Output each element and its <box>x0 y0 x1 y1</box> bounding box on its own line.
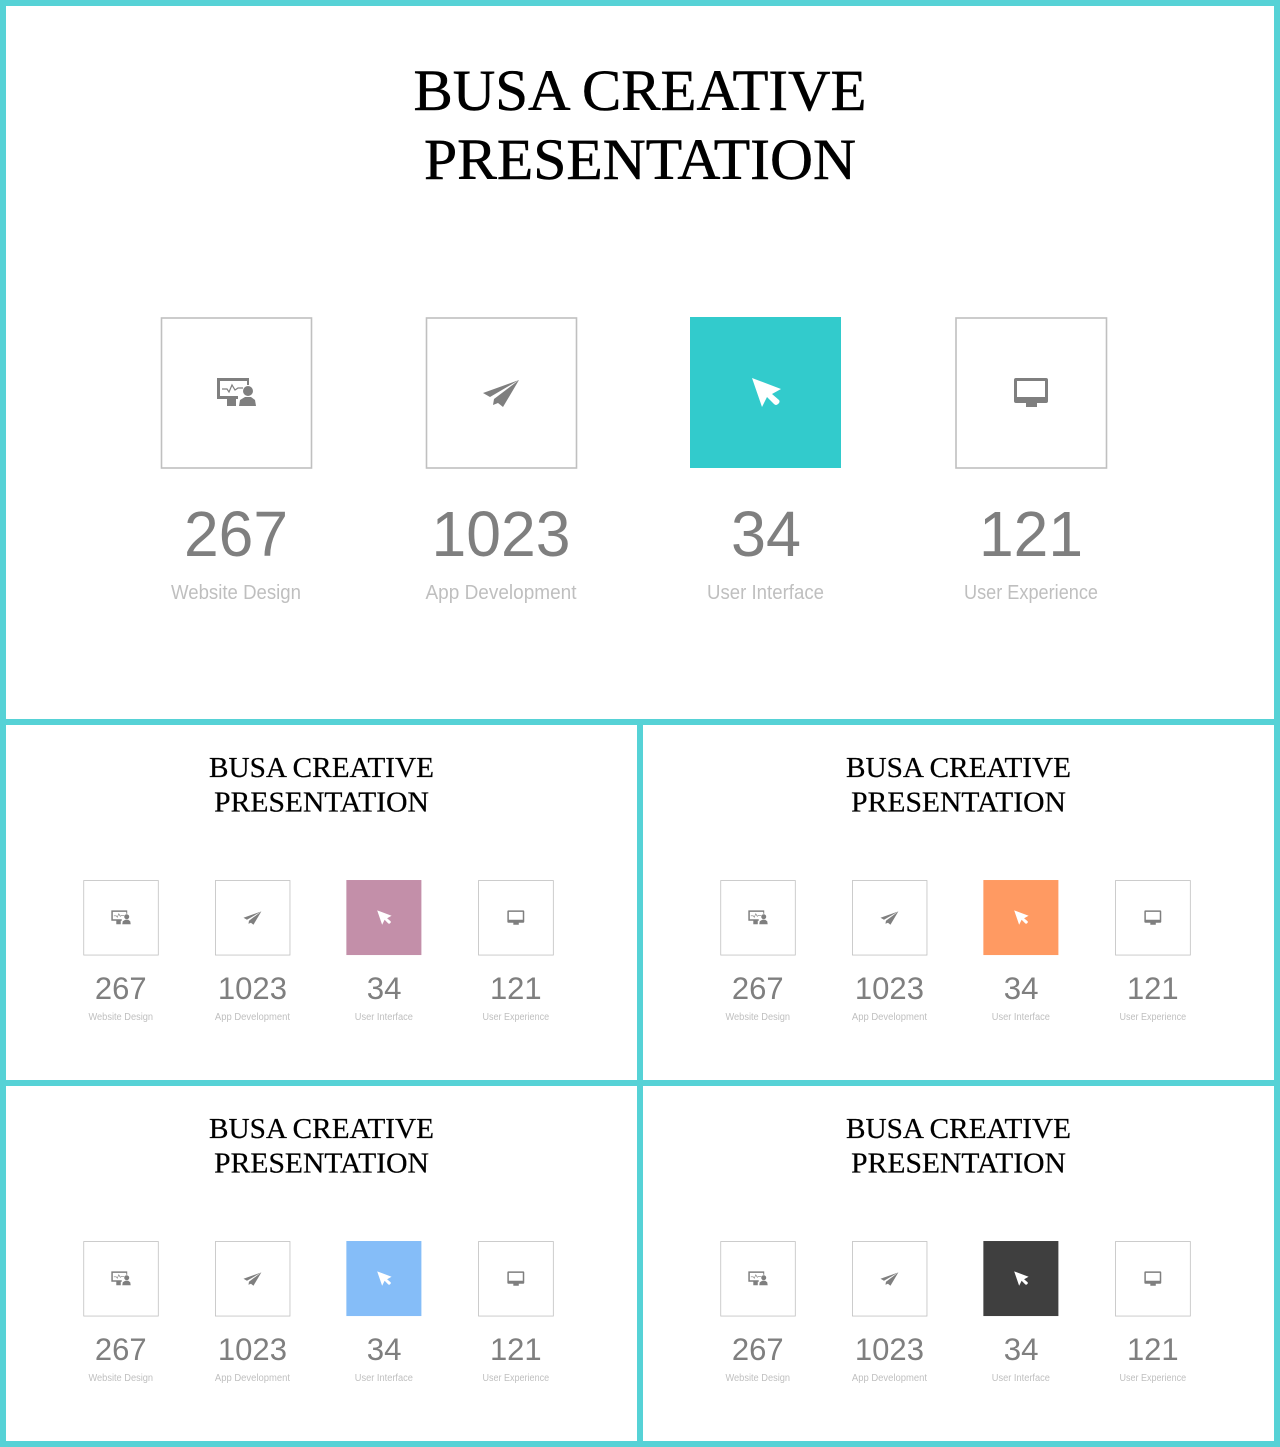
tile: user interface: User Interface <box>707 582 824 604</box>
heading: orange variant title: PRESENTATION <box>851 786 1066 818</box>
tile: app development: 1023 <box>432 498 570 570</box>
heading: pink variant title: BUSA CREATIVE <box>209 752 434 784</box>
tile: user interface <box>690 317 841 604</box>
tile: website design: Website Design <box>725 1373 790 1384</box>
tile: user interface: 34 <box>1004 970 1039 1006</box>
tile: app development: 1023 <box>218 970 287 1006</box>
tile: user experience <box>1116 881 1190 1023</box>
tile: app development <box>852 881 927 1023</box>
tile: user interface: User Interface <box>992 1373 1050 1384</box>
tile: app development: App Development <box>215 1373 290 1384</box>
tile: user experience <box>479 881 553 1023</box>
tile: website design: Website Design <box>88 1373 153 1384</box>
tile: user interface <box>346 1241 421 1384</box>
heading: main title: PRESENTATION <box>424 127 856 192</box>
heading: main title <box>414 58 866 192</box>
tile: user interface: 34 <box>367 970 402 1006</box>
tile: app development <box>215 881 290 1023</box>
tile: website design: 267 <box>732 1331 784 1367</box>
tile: user interface: User Interface <box>992 1012 1050 1023</box>
tile: app development: App Development <box>852 1373 927 1384</box>
heading: pink variant title <box>209 752 434 818</box>
tile: website design <box>162 318 312 604</box>
panel: pink variant <box>84 752 553 1023</box>
heading: blue variant title: BUSA CREATIVE <box>209 1113 434 1145</box>
heading: dark variant title: PRESENTATION <box>851 1147 1066 1179</box>
tile: app development: App Development <box>852 1012 927 1023</box>
tile: user interface <box>983 880 1058 1023</box>
tile: user experience: User Experience <box>1120 1012 1187 1023</box>
tile: user experience <box>479 1242 553 1384</box>
heading: blue variant title <box>209 1113 434 1179</box>
tile: app development <box>852 1242 927 1384</box>
tile: user experience <box>1116 1242 1190 1384</box>
tile: website design: Website Design <box>171 582 301 604</box>
tile: app development: App Development <box>215 1012 290 1023</box>
tile: user experience: User Experience <box>483 1012 550 1023</box>
tile: website design: 267 <box>184 498 288 570</box>
tile: user interface: 34 <box>1004 1331 1039 1367</box>
tile: user experience: 121 <box>490 970 542 1006</box>
tile: website design <box>721 881 795 1023</box>
tile: website design: 267 <box>95 970 147 1006</box>
panel: main slide <box>162 58 1106 604</box>
tile: user experience: User Experience <box>964 582 1098 604</box>
tile: user interface: User Interface <box>355 1373 413 1384</box>
tile: user experience: 121 <box>1127 1331 1179 1367</box>
heading: dark variant title <box>846 1113 1071 1179</box>
panel: blue variant <box>84 1113 553 1384</box>
tile: user interface: User Interface <box>355 1012 413 1023</box>
tile: user experience: User Experience <box>1120 1373 1187 1384</box>
tile: user experience: 121 <box>490 1331 542 1367</box>
tile: website design: 267 <box>732 970 784 1006</box>
tile: app development: 1023 <box>218 1331 287 1367</box>
heading: dark variant title: BUSA CREATIVE <box>846 1113 1071 1145</box>
tile: app development <box>215 1242 290 1384</box>
tile: website design <box>84 1242 158 1384</box>
panel: dark variant <box>721 1113 1190 1384</box>
tile: app development: App Development <box>426 582 577 604</box>
tile: website design: 267 <box>95 1331 147 1367</box>
tile: user experience <box>956 318 1106 604</box>
tile: user interface <box>983 1241 1058 1384</box>
tile: website design <box>84 881 158 1023</box>
heading: main title: BUSA CREATIVE <box>414 58 866 123</box>
heading: orange variant title: BUSA CREATIVE <box>846 752 1071 784</box>
heading: pink variant title: PRESENTATION <box>214 786 429 818</box>
tile: user interface: 34 <box>367 1331 402 1367</box>
tile: app development <box>426 318 577 604</box>
heading: blue variant title: PRESENTATION <box>214 1147 429 1179</box>
heading: orange variant title <box>846 752 1071 818</box>
tile: app development: 1023 <box>855 1331 924 1367</box>
tile: user experience: User Experience <box>483 1373 550 1384</box>
tile: website design: Website Design <box>725 1012 790 1023</box>
panel: orange variant <box>721 752 1190 1023</box>
tile: user interface: 34 <box>731 498 801 570</box>
tile: app development: 1023 <box>855 970 924 1006</box>
tile: user experience: 121 <box>1127 970 1179 1006</box>
tile: user experience: 121 <box>979 498 1083 570</box>
tile: website design <box>721 1242 795 1384</box>
tile: website design: Website Design <box>88 1012 153 1023</box>
tile: user interface <box>346 880 421 1023</box>
